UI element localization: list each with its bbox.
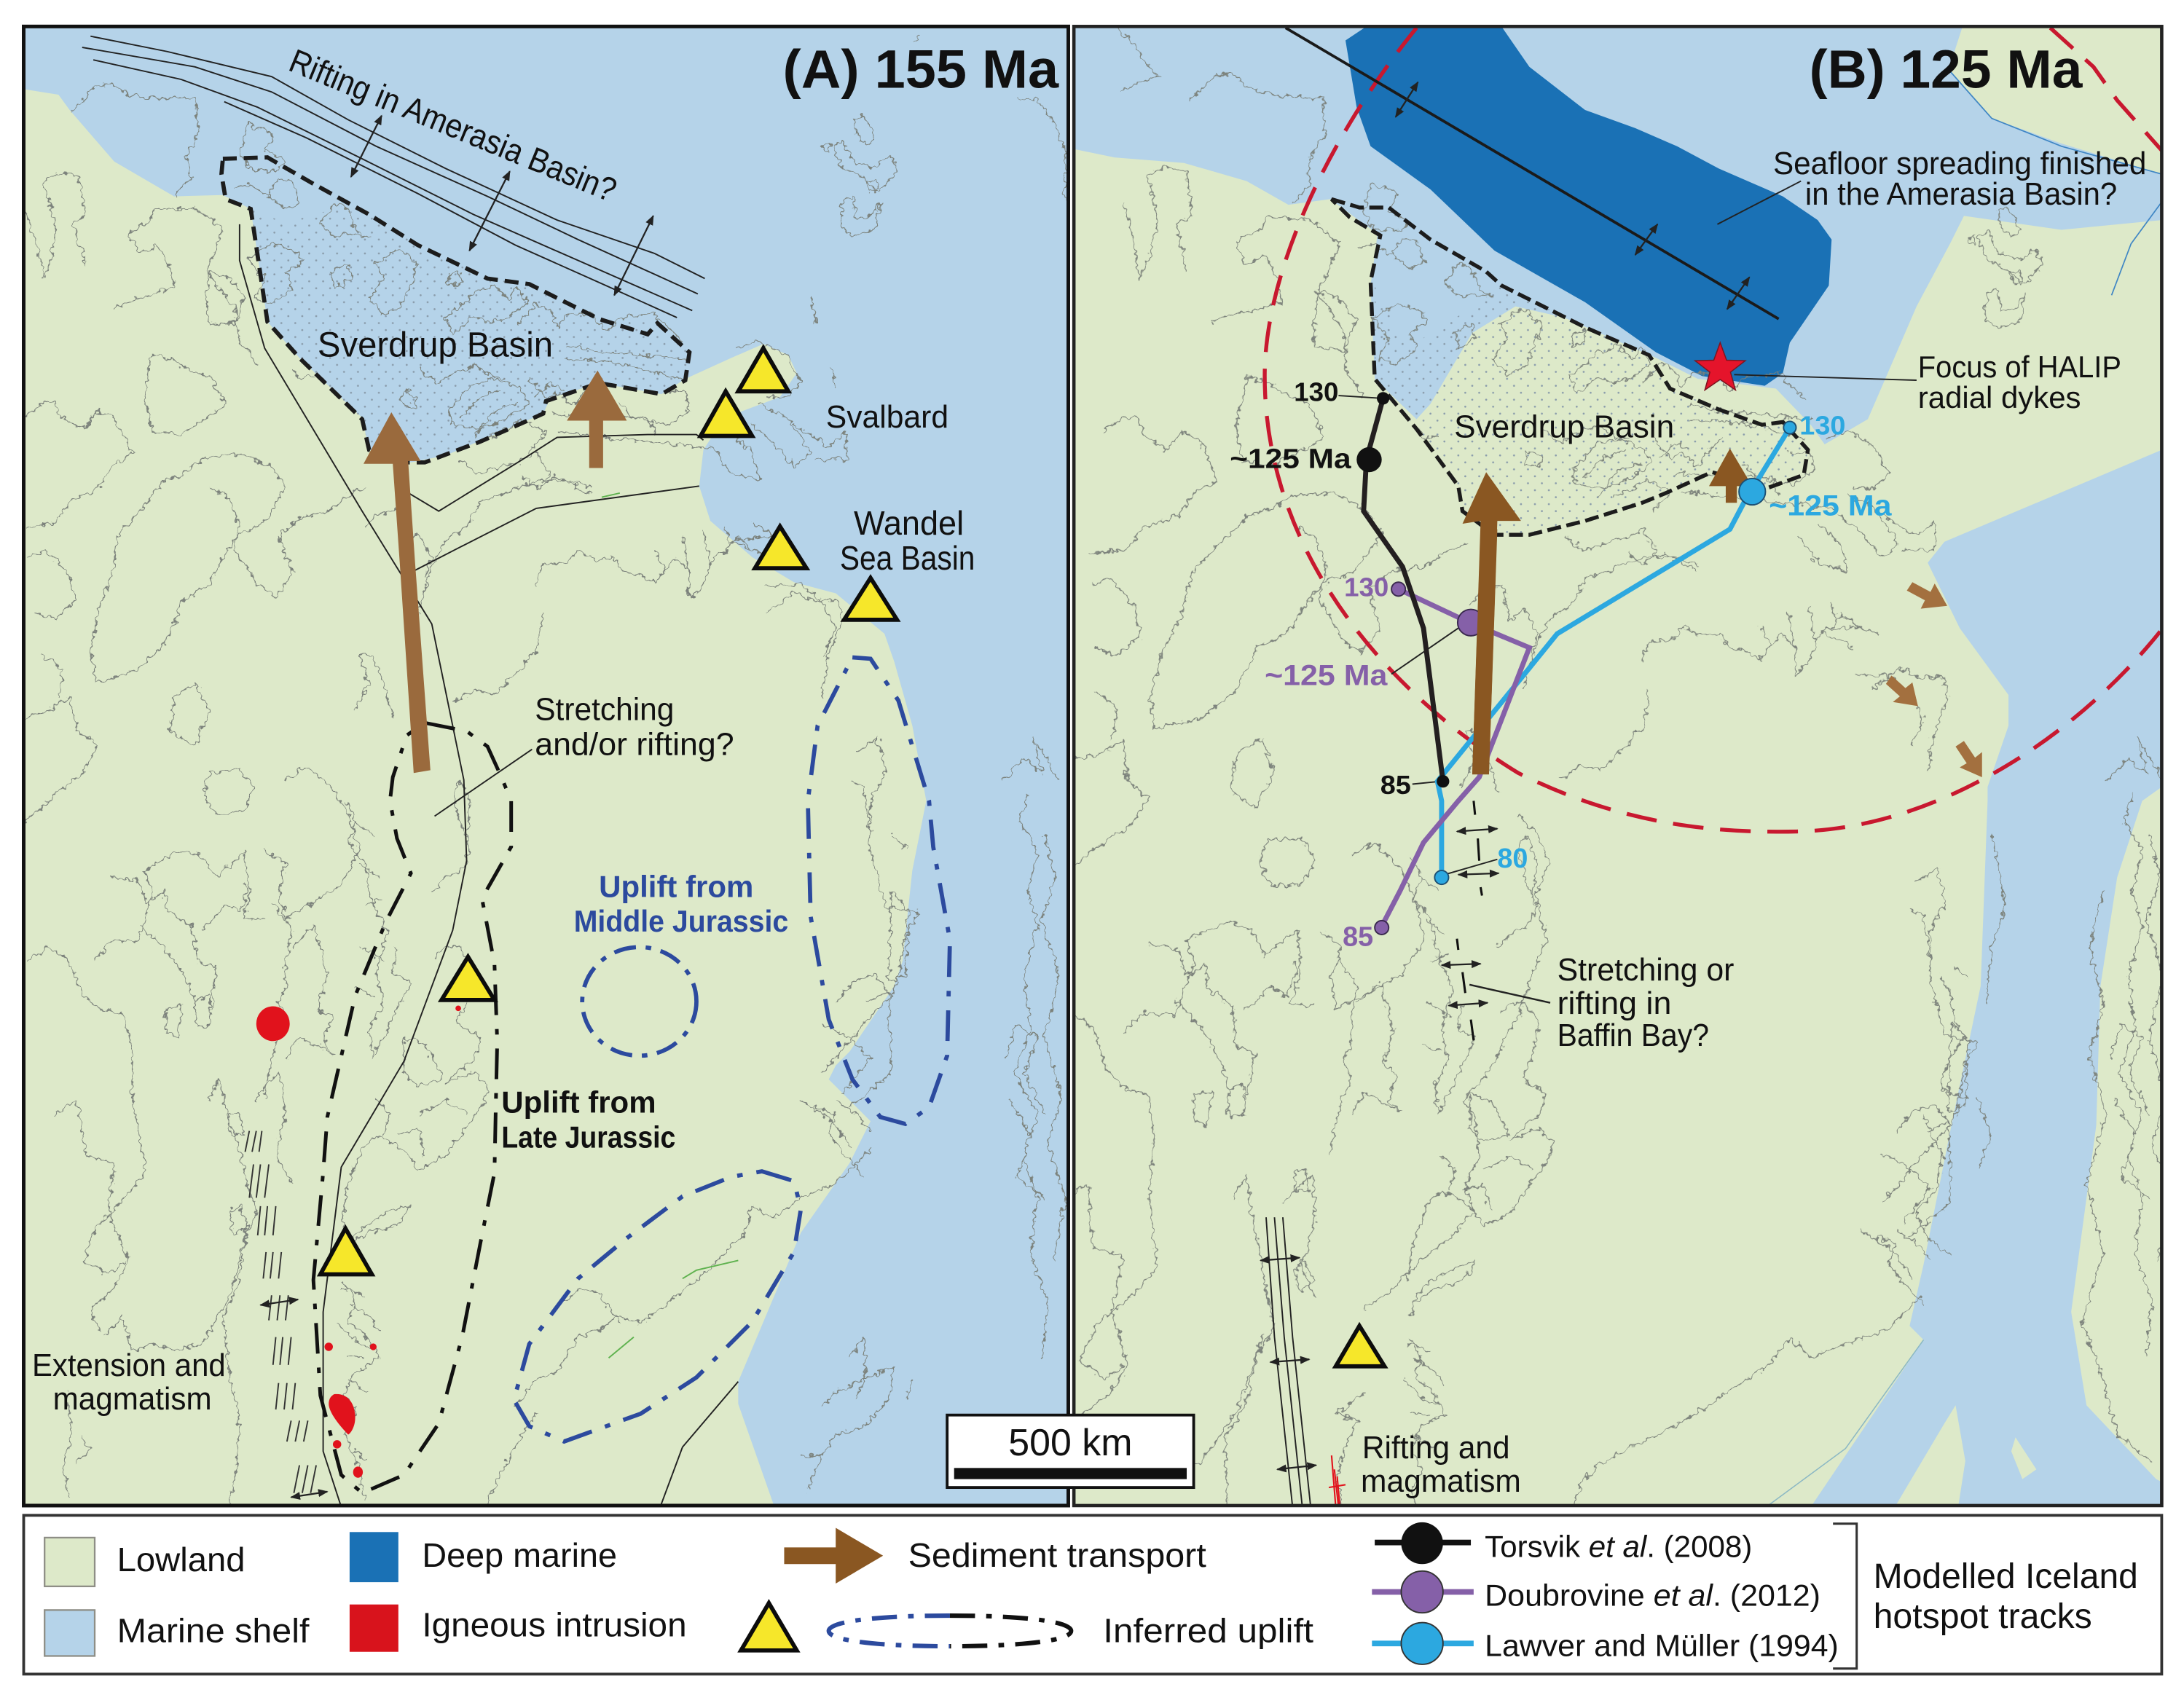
sediment transport short arrow A xyxy=(567,371,626,468)
label: Stretching and/or rifting?: Stretching xyxy=(535,692,674,728)
label: Stretching or rifting in Baffin Bay?: rifting in xyxy=(1558,986,1671,1021)
label: Wandel Sea Basin: Sea Basin xyxy=(840,539,975,577)
Lawver track age labels: 80 xyxy=(1497,843,1528,874)
islands in lower shelf xyxy=(1896,1405,1965,1506)
label: Uplift from Middle Jurassic: Uplift from xyxy=(599,869,753,903)
label: Wandel Sea Basin xyxy=(840,504,975,577)
label: Uplift from Late Jurassic xyxy=(501,1085,675,1155)
legend: Lawver and Muller (1994) xyxy=(1372,1623,1839,1664)
title: (B) 125 Ma: (B) 125 Ma xyxy=(1810,39,2083,99)
marine shelf background A xyxy=(24,26,1068,1506)
label: Uplift from Middle Jurassic xyxy=(574,869,788,938)
rift lines in Amerasia Basin xyxy=(82,36,704,318)
legend: Marine shelf xyxy=(44,1610,310,1656)
label: Extension and magmatism: Extension and xyxy=(32,1348,226,1383)
panel A: 155 Ma map xyxy=(24,26,1068,1507)
leader lines B xyxy=(1338,181,1917,1003)
label: Seafloor spreading finished: in the Amerasia Basin? xyxy=(1805,176,2117,212)
igneous intrusions A xyxy=(256,1006,461,1478)
label: Stretching or rifting in Baffin Bay?: Stretching or xyxy=(1558,952,1734,988)
uplift triangle B xyxy=(1336,1326,1385,1366)
hotspot track: Lawver and Muller xyxy=(1434,421,1796,884)
Baffin Bay rift dashes and arrows xyxy=(1442,801,1498,1040)
Torsvik track age labels: ~125 Ma xyxy=(1230,443,1351,474)
label: Seafloor spreading finished xyxy=(1773,146,2146,212)
Lawver track age labels xyxy=(1497,411,1892,874)
blue dash-dot uplift, southeast Greenland xyxy=(514,1171,801,1442)
red dashed plume head outline, top right xyxy=(2050,28,2161,151)
uplift triangles A xyxy=(321,348,897,1275)
stippled Sverdrup Basin fill B xyxy=(1375,286,1808,535)
title: (A) 155 Ma: (A) 155 Ma xyxy=(783,39,1059,99)
legend: triangle symbol xyxy=(741,1603,797,1651)
legend: Sediment transport: Sediment transport xyxy=(908,1536,1206,1574)
legend: Torsvik et al. (2008): Torsvik et al. (2008) xyxy=(1485,1530,1752,1564)
blue dashed circle, central Greenland uplift xyxy=(582,947,696,1055)
extension arrows A xyxy=(261,1299,327,1497)
legend: Doubrovine et al. (2012) xyxy=(1372,1571,1820,1613)
parallel dyke swarm lines xyxy=(245,1131,316,1493)
label: Rifting and magmatism: magmatism xyxy=(1361,1463,1521,1499)
lowland land mass A xyxy=(24,89,926,1507)
label: Focus of HALIP radial dykes: Focus of HALIP xyxy=(1918,350,2121,384)
label: Sverdrup Basin B: Sverdrup Basin xyxy=(1454,409,1674,444)
legend: Sediment transport xyxy=(784,1528,1206,1584)
Sverdrup Basin dashed outline B xyxy=(1332,199,1808,535)
coastline outlines B xyxy=(988,28,2170,1660)
coastline outlines A xyxy=(24,35,1066,1507)
Torsvik track age labels xyxy=(1230,377,1411,800)
Doubrovine track age labels xyxy=(1265,572,1388,952)
tectonic and drainage thin lines A xyxy=(240,224,738,1507)
blue dash-dot uplift, eastern Greenland xyxy=(808,658,950,1124)
legend: Igneous intrusion: Igneous intrusion xyxy=(422,1606,687,1644)
redraw long arrow shaft over tracks xyxy=(1472,530,1497,774)
label: Uplift from Middle Jurassic: Middle Jurassic xyxy=(574,904,788,938)
label: Focus of HALIP radial dykes xyxy=(1918,350,2121,414)
label: Uplift from Late Jurassic: Late Jurassic xyxy=(501,1120,675,1155)
small sediment arrows B xyxy=(1886,582,1982,777)
label: Focus of HALIP radial dykes: radial dykes xyxy=(1918,380,2081,414)
legend panel xyxy=(24,1515,2161,1674)
legend: Marine shelf: Marine shelf xyxy=(117,1611,310,1649)
legend: Modelled Iceland hotspot tracks: hotspot tracks xyxy=(1874,1597,2092,1636)
scale bar: 500 km: 500 km xyxy=(1008,1421,1132,1463)
label: Extension and magmatism: magmatism xyxy=(53,1381,212,1417)
spreading ridge and arrows xyxy=(1286,28,1779,319)
red dashed plume head outline xyxy=(1265,28,2161,832)
legend: Inferred uplift: Inferred uplift xyxy=(1103,1611,1313,1649)
label: Svalbard: Svalbard xyxy=(826,399,948,435)
label: Rifting and magmatism: Rifting and xyxy=(1362,1430,1510,1466)
Labrador Sea rift lines and arrows xyxy=(1260,1217,1316,1507)
stippled Sverdrup Basin fill A xyxy=(251,209,689,463)
legend: Deep marine: Deep marine xyxy=(422,1536,617,1574)
label: Rifting in Amerasia Basin?: Rifting in Amerasia Basin? xyxy=(284,42,622,209)
black dash-dot inferred uplift from Late Jurassic xyxy=(313,723,511,1493)
legend: Lowland: Lowland xyxy=(117,1541,245,1578)
Torsvik track age labels: 130 xyxy=(1294,377,1338,407)
frame A xyxy=(24,26,1068,1506)
Greenland/Barents land top right xyxy=(1949,26,2161,174)
Doubrovine track age labels: 85 xyxy=(1343,921,1373,952)
Lawver track age labels: ~125 Ma xyxy=(1769,489,1892,522)
label: Extension and magmatism xyxy=(32,1348,226,1417)
label: Stretching or rifting in Baffin Bay? xyxy=(1558,952,1734,1053)
hotspot track: Doubrovine xyxy=(1375,582,1529,935)
Lawver track age labels: 130 xyxy=(1799,411,1845,441)
panel B: 125 Ma map xyxy=(988,26,2170,1660)
star: focus of HALIP radial dykes xyxy=(1695,342,1745,390)
legend: Modelled Iceland hotspot tracks: Modelled Iceland xyxy=(1874,1557,2138,1596)
label: Seafloor spreading finished: Seafloor spreading finished xyxy=(1773,146,2146,181)
Sverdrup Basin dashed outline A xyxy=(221,157,689,463)
legend: Igneous intrusion xyxy=(350,1605,687,1652)
label: Stretching and/or rifting? xyxy=(535,692,734,762)
legend: Torsvik et al. (2008) xyxy=(1375,1522,1752,1564)
marine shelf background B xyxy=(1074,26,2161,1506)
scale bar: 500 km xyxy=(947,1415,1194,1487)
label: Sverdrup Basin A: Sverdrup Basin xyxy=(318,326,553,364)
red igneous dykes B xyxy=(1329,1455,1346,1507)
Doubrovine track age labels: 130 xyxy=(1344,572,1388,602)
legend: Modelled Iceland hotspot tracks xyxy=(1874,1557,2138,1636)
leader line: stretching xyxy=(435,750,532,816)
legend: Lawver and Muller (1994): Lawver and Müller (1994) xyxy=(1485,1628,1839,1662)
Torsvik track age labels: 85 xyxy=(1380,770,1411,800)
legend: Doubrovine et al. (2012): Doubrovine et al. (2012) xyxy=(1485,1578,1820,1613)
hotspot track: Torsvik xyxy=(1356,392,1449,787)
legend: Lowland xyxy=(44,1538,245,1586)
sediment transport short arrow B xyxy=(1709,449,1752,503)
legend: Deep marine xyxy=(350,1532,617,1582)
sediment transport long arrow A xyxy=(364,412,431,773)
label: Uplift from Late Jurassic: Uplift from xyxy=(501,1085,656,1120)
lowland land mass B xyxy=(1074,149,2161,1507)
frame B xyxy=(1074,26,2161,1506)
legend: Inferred uplift xyxy=(829,1611,1313,1649)
label: Stretching and/or rifting?: and/or rifting? xyxy=(535,726,734,762)
legend frame xyxy=(24,1515,2161,1674)
label: Wandel Sea Basin: Wandel xyxy=(854,504,964,542)
label: Stretching or rifting in Baffin Bay?: Baffin Bay? xyxy=(1558,1018,1709,1053)
deep marine Amerasia Basin xyxy=(1346,26,1831,386)
land strip lower right xyxy=(2071,787,2161,1482)
label: Rifting and magmatism xyxy=(1361,1430,1521,1499)
thin shelf-edge lines B xyxy=(1766,70,2161,1507)
sediment transport long arrow B xyxy=(1463,472,1521,774)
legend: bracket xyxy=(1833,1524,1857,1669)
Doubrovine track age labels: ~125 Ma xyxy=(1265,659,1388,692)
